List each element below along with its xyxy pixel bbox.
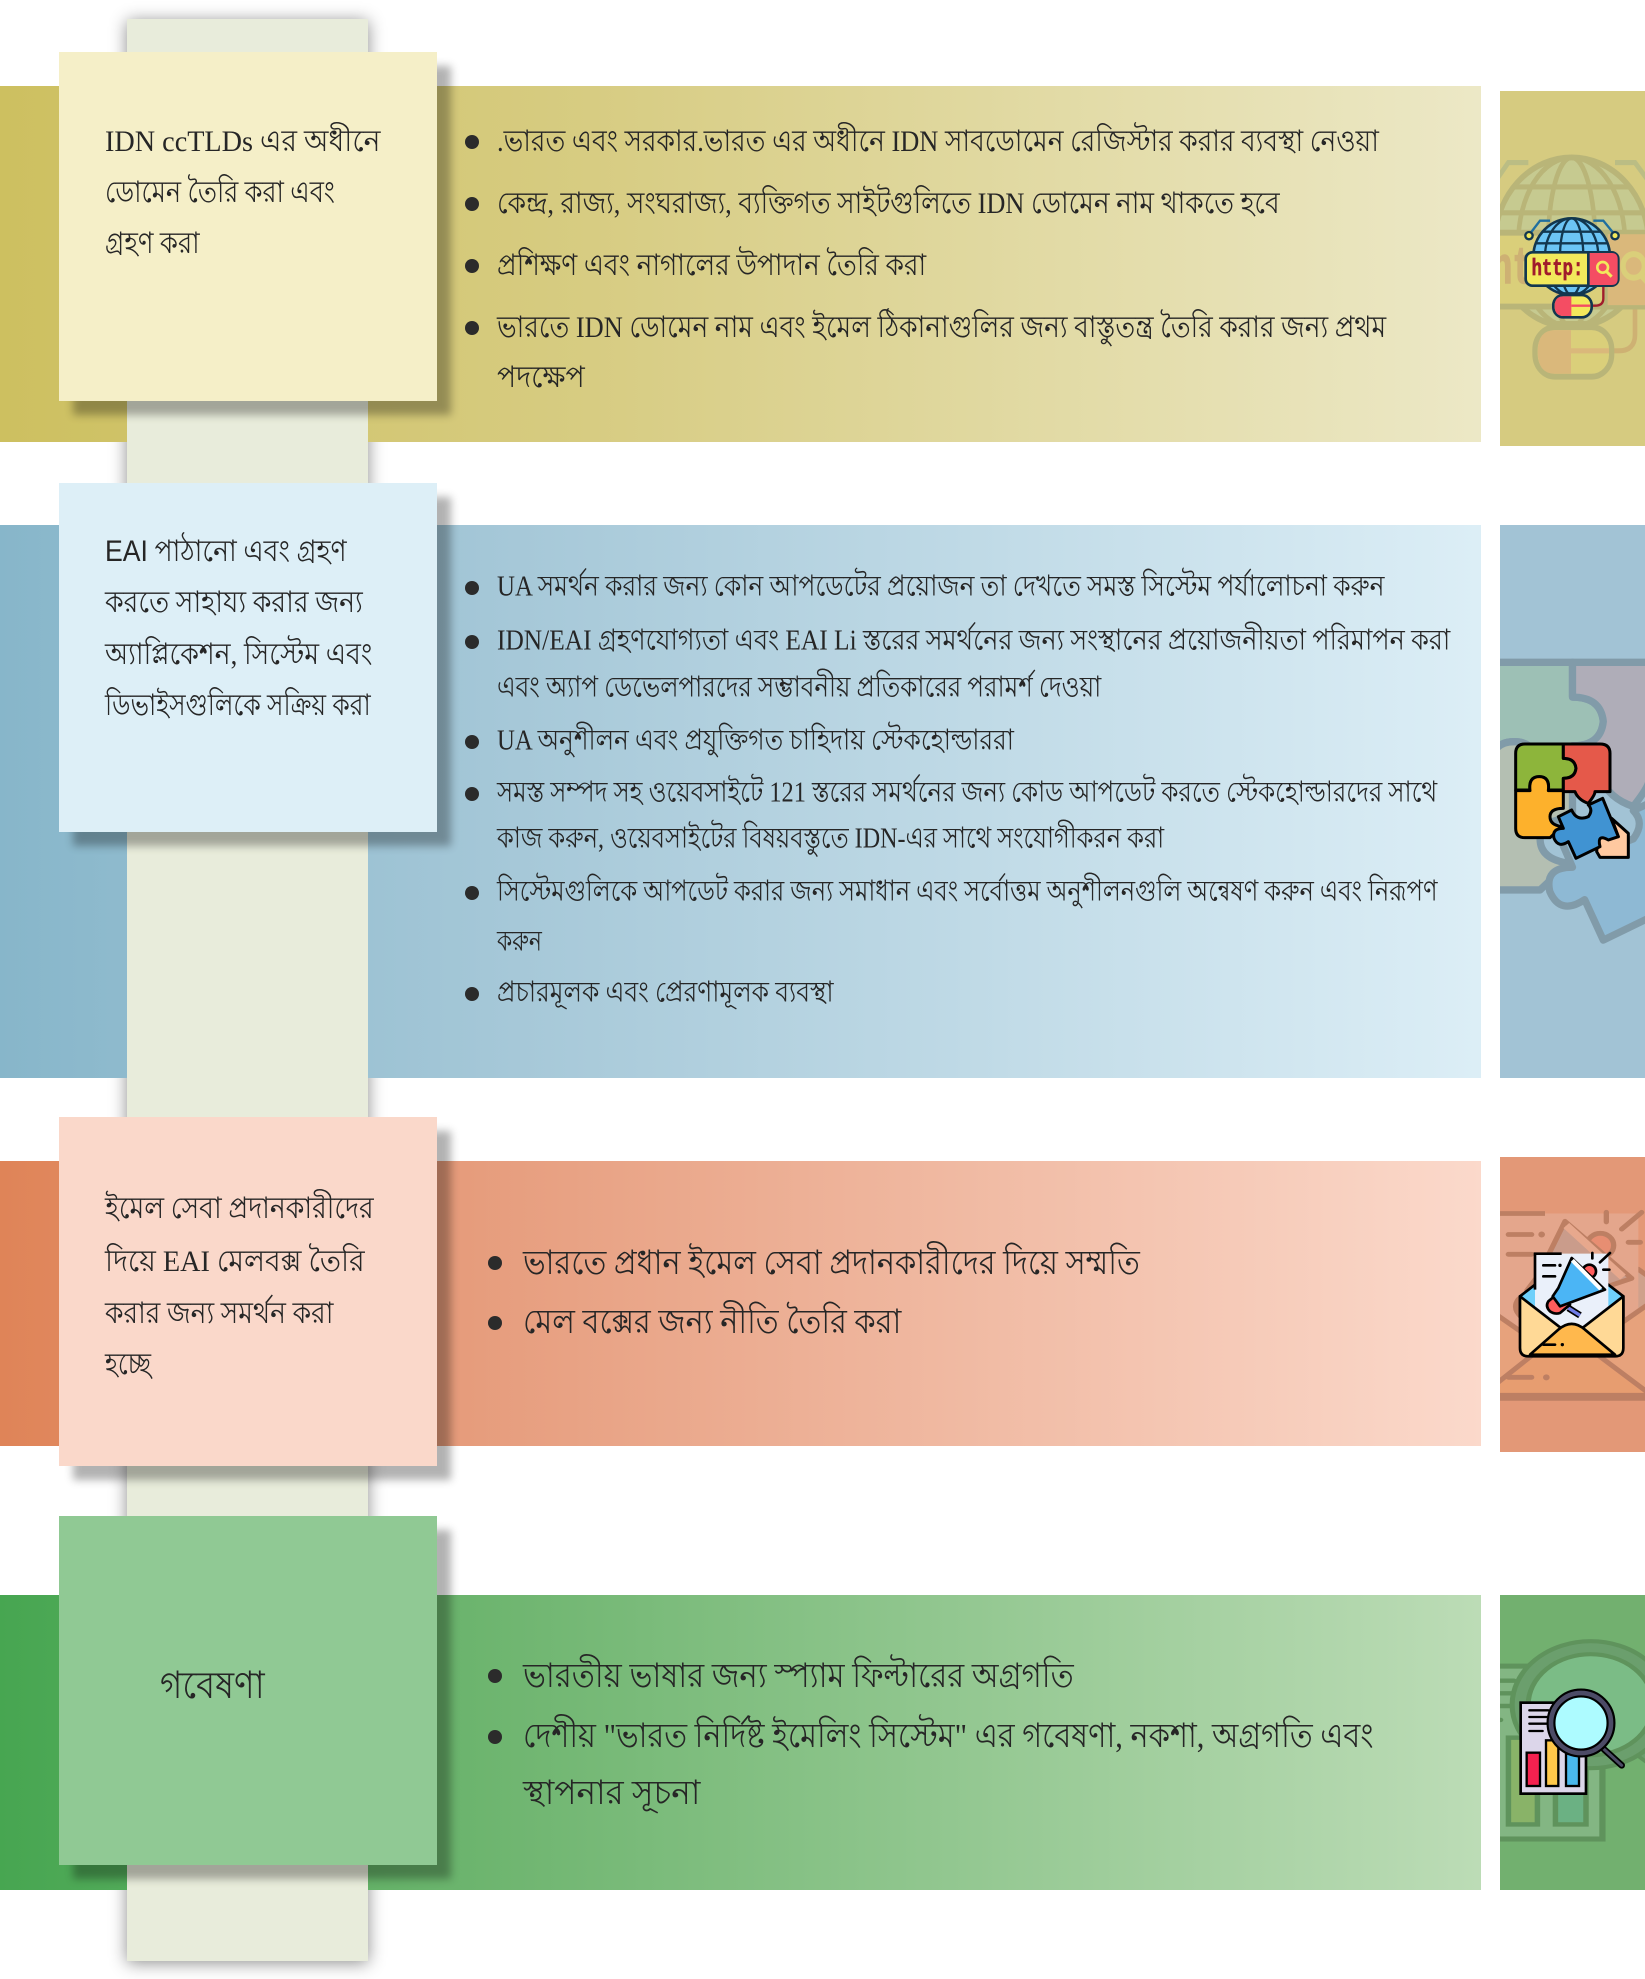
card text: EAI applications: ডিভাইসগুলিকে সক্রিয় করা — [105, 689, 371, 722]
faded large globe — [1479, 157, 1645, 377]
card text: EAI mailboxes — [104, 1189, 374, 1381]
list: research: স্থাপনার সূচনা — [523, 1775, 700, 1812]
card text: EAI mailboxes: হচ্ছে — [105, 1348, 151, 1381]
list: EAI applications: প্রচারমূলক এবং প্রেরণামূলক ব্যবস্থা — [497, 976, 834, 1008]
faded large envelope — [1462, 1212, 1645, 1398]
card text: EAI mailboxes: করার জন্য সমর্থন করা — [105, 1297, 333, 1330]
small envelope icon — [1520, 1253, 1623, 1356]
list: EAI applications: IDN/EAI গ্রহণযোগ্যতা এবং EAI Li স্তরের সমর্থনের জন্য সংস্থানের প্রয়োজনীয়তা পরিমাপন করা — [497, 624, 1450, 656]
card: EAI mailboxes — [59, 1117, 437, 1466]
card text: EAI applications: করতে সাহায্য করার জন্য — [105, 586, 363, 619]
card text: IDN ccTLDs: IDN ccTLDs এর অধীনে — [105, 125, 381, 158]
list: EAI mailboxes: ভারতে প্রধান ইমেল সেবা প্রদানকারীদের দিয়ে সম্মতি — [523, 1245, 1140, 1282]
card text: research: গবেষণা — [160, 1665, 265, 1707]
card text: EAI applications — [104, 532, 372, 722]
list: EAI applications: সমস্ত সম্পদ সহ ওয়েবসাইটে 121 স্তরের সমর্থনের জন্য কোড আপডেট করতে স্টেকহোল্ডারদের সাথে — [497, 776, 1437, 808]
small chart icon — [1521, 1693, 1622, 1794]
list: research — [488, 1654, 1373, 1814]
small globe icon — [1525, 218, 1619, 317]
list: IDN ccTLDs: পদক্ষেপ — [497, 361, 585, 394]
band: research — [0, 1595, 1481, 1890]
list: EAI applications — [465, 568, 1451, 1010]
list: IDN ccTLDs: প্রশিক্ষণ এবং নাগালের উপাদান তৈরি করা — [497, 249, 926, 282]
list: EAI applications: কাজ করুন, ওয়েবসাইটের বিষয়বস্তুতে IDN-এর সাথে সংযোগীকরন করা — [497, 822, 1164, 854]
band: EAI applications — [0, 525, 1481, 1078]
card text: EAI mailboxes: ইমেল সেবা প্রদানকারীদের — [105, 1192, 374, 1225]
list: EAI mailboxes — [488, 1241, 1140, 1341]
list: research: ভারতীয় ভাষার জন্য স্প্যাম ফিল্টারের অগ্রগতি — [523, 1658, 1074, 1695]
list: research: দেশীয় "ভারত নির্দিষ্ট ইমেলিং সিস্টেম" এর গবেষণা, নকশা, অগ্রগতি এবং — [523, 1718, 1373, 1755]
card: research — [59, 1516, 437, 1865]
list: EAI applications: UA অনুশীলন এবং প্রযুক্তিগত চাহিদায় স্টেকহোল্ডাররা — [497, 724, 1014, 756]
list: IDN ccTLDs — [465, 122, 1386, 394]
faded large chart — [1449, 1648, 1645, 1839]
icon panel: globe with http search bar — [1500, 91, 1645, 446]
list: EAI applications: করুন — [497, 926, 542, 958]
band: EAI mailboxes — [0, 1161, 1481, 1446]
icon panel: magnifier over bar chart — [1500, 1595, 1645, 1890]
list: IDN ccTLDs: .ভারত এবং সরকার.ভারত এর অধীনে IDN সাবডোমেন রেজিস্টার করার ব্যবস্থা নেওয়া — [497, 125, 1379, 158]
card text: IDN ccTLDs — [105, 122, 381, 260]
icon panel: puzzle pieces — [1500, 525, 1645, 1078]
card: EAI applications — [59, 483, 437, 832]
list: EAI mailboxes: মেল বক্সের জন্য নীতি তৈরি করা — [523, 1304, 901, 1341]
faded large puzzle — [1457, 662, 1645, 940]
list: IDN ccTLDs: কেন্দ্র, রাজ্য, সংঘরাজ্য, ব্যক্তিগত সাইটগুলিতে IDN ডোমেন নাম থাকতে হবে — [497, 187, 1280, 220]
list: EAI applications: UA সমর্থন করার জন্য কোন আপডেটের প্রয়োজন তা দেখতে সমস্ত সিস্টেম পর্যালোচনা করুন — [497, 570, 1385, 602]
vertical timeline column — [127, 19, 368, 1961]
card text: IDN ccTLDs: ডোমেন তৈরি করা এবং — [105, 176, 335, 209]
card text: EAI mailboxes: দিয়ে EAI মেলবক্স তৈরি — [105, 1245, 365, 1278]
card text: EAI applications: অ্যাপ্লিকেশন, সিস্টেম এবং — [105, 638, 372, 671]
card text: IDN ccTLDs: গ্রহণ করা — [105, 227, 200, 260]
icon panel: envelope with megaphone — [1500, 1157, 1645, 1452]
list: IDN ccTLDs: ভারতে IDN ডোমেন নাম এবং ইমেল ঠিকানাগুলির জন্য বাস্তুতন্ত্র তৈরি করার জন্য প্রথম — [497, 311, 1386, 344]
small puzzle icon — [1516, 744, 1628, 858]
list: EAI applications: এবং অ্যাপ ডেভেলপারদের সম্ভাবনীয় প্রতিকারের পরামর্শ দেওয়া — [497, 672, 1101, 704]
band: IDN ccTLDs — [0, 86, 1481, 442]
card: IDN ccTLDs — [59, 52, 437, 401]
list: EAI applications: সিস্টেমগুলিকে আপডেট করার জন্য সমাধান এবং সর্বোত্তম অনুশীলনগুলি অন্বেষণ করুন এবং নিরূপণ — [497, 876, 1438, 908]
card text: EAI applications: EAI পাঠানো এবং গ্রহণ — [105, 535, 347, 568]
